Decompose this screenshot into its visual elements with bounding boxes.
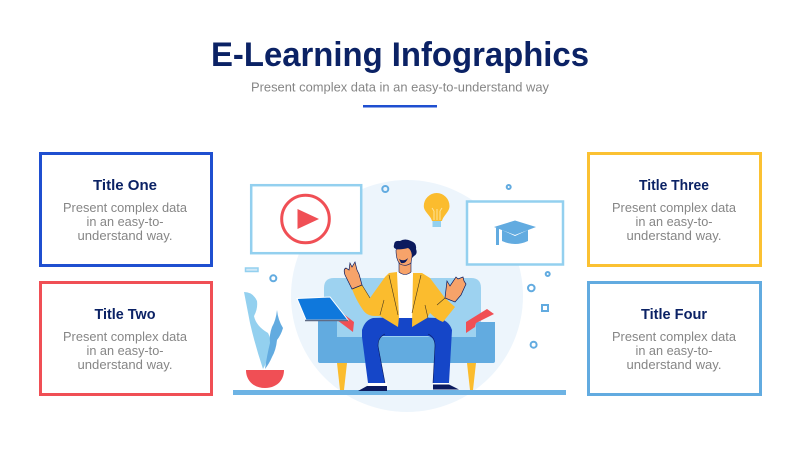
panel: title four [588,282,760,394]
sofa [318,278,495,390]
decorative dots [246,185,550,348]
panel: title four: Title Four [641,306,707,323]
panel: title two [40,282,212,394]
video player window [251,185,361,253]
panel: title one: Present complex data [63,201,187,215]
left hand [344,262,362,289]
shoes [358,386,387,391]
panel: title three: Title Three [639,177,709,194]
panel: title two: Present complex data [63,330,187,344]
subtitle: Present complex data in an easy-to-understand way [251,80,550,94]
shirt [397,272,413,318]
graduation cap window [467,202,563,264]
person [344,240,466,391]
socks [368,382,449,387]
panel: title one: Title One [93,177,157,194]
panel: title two: in an easy-to- [86,344,164,358]
panel: title two: Title Two [94,306,156,323]
plant [244,292,284,388]
panel: title three [588,154,760,266]
panel: title three: Present complex data [612,201,736,215]
right hand [445,277,466,302]
jacket and sleeves [352,272,399,327]
neck and face [399,262,411,274]
panel: title four: in an easy-to- [636,344,712,358]
panel: title three: understand way. [626,229,722,243]
title underline [363,105,437,108]
trousers [362,317,452,383]
floor [233,390,566,395]
panel: title two: understand way. [78,358,172,372]
background circle [291,180,523,412]
hair [394,240,417,258]
panel: title one [40,154,212,266]
title: E-Learning Infographics [211,36,589,74]
icon: light bulb [424,193,450,227]
panel: title four: understand way. [626,358,722,372]
laptop [297,297,348,320]
panel: title three: in an easy-to- [636,215,712,229]
panel: title one: understand way. [78,229,172,243]
illustration: e-learning scene [233,180,566,412]
panel: title one: in an easy-to- [86,215,164,229]
panel: title four: Present complex data [612,330,736,344]
